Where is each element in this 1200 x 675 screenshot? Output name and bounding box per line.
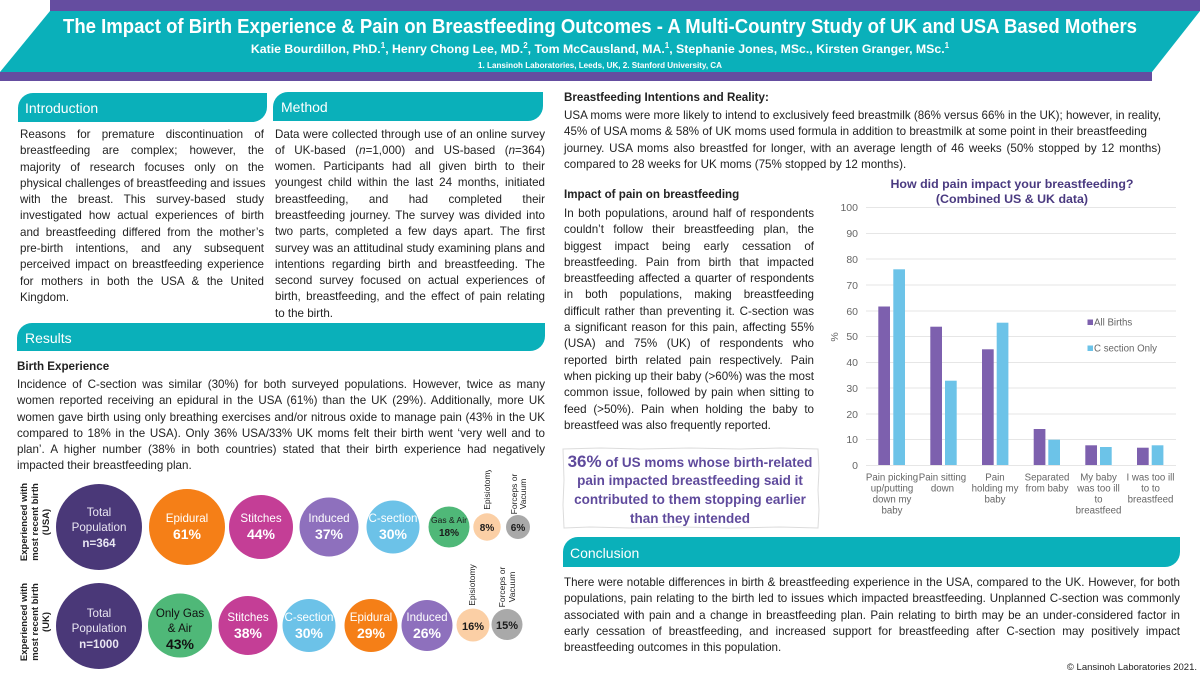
- text: birth experience: women reported receiving an epidural in the USA (61%) than the UK (29%). Additionally, more UK: [17, 394, 545, 407]
- callout: 36% statistic: [562, 448, 820, 528]
- y axis title: %: [829, 332, 841, 342]
- bubble: stitches USA: Stitches: [240, 512, 282, 525]
- text: birth experience: impacted their breastfeeding plan.: [17, 459, 192, 472]
- bubble chart: birth experiences: [19, 470, 530, 669]
- text: impact of pain: In both populations, around half of respondents: [564, 207, 814, 220]
- subheading: impact of pain: Impact of pain on breastfeeding: [564, 188, 739, 201]
- text: birth experience: plan’. A higher number (38% in both countries) stated that their birth experience had negatively: [17, 443, 545, 456]
- y axis labels: 60: [846, 306, 858, 318]
- text: method: women. Participants had all given birth to their: [275, 160, 545, 173]
- text: introduction: Reasons for premature discontinuation of: [20, 128, 264, 141]
- bubble: c-section UK: [282, 599, 336, 652]
- callout text: 36% of US moms whose birth-related: [568, 452, 812, 471]
- text: birth experience: Incidence of C-section was similar (30%) for both surveyed populations. However, twice as many: [17, 378, 545, 391]
- row label: USA: [19, 483, 52, 561]
- label: forceps or vacuum USA: [509, 474, 528, 514]
- text: method: breastfeeding, and had completed their: [275, 193, 545, 206]
- bubble: only gas and air UK: 43%: [166, 636, 195, 652]
- bubble: epidural USA: 61%: [173, 526, 202, 542]
- y axis labels: 50: [846, 331, 858, 343]
- text: intentions and reality: [564, 109, 1161, 171]
- callout text: than they intended: [630, 511, 750, 526]
- bubble: epidural UK: Epidural: [350, 611, 392, 624]
- text: conclusion: There were notable differences in birth & breastfeeding experience in the USA, compared to the UK. However, for both: [564, 576, 1180, 589]
- chart title: (Combined US & UK data): [936, 192, 1088, 206]
- subheading: intentions and reality: Breastfeeding Intentions and Reality:: [564, 91, 769, 104]
- callout text: [568, 452, 812, 526]
- text: impact of pain: breastfeed was also frequently reported.: [564, 419, 771, 432]
- bubble: total population UK: Population: [72, 622, 126, 635]
- bubble: c-section UK: 30%: [295, 625, 324, 641]
- bars: all births: [878, 306, 1149, 465]
- row label: USA: (USA): [41, 509, 52, 535]
- category labels: down my: [873, 494, 912, 506]
- authors: Katie Bourdillon, PhD.1, Henry Chong Lee, MD.2, Tom McCausland, MA.1, Stephanie Jones, MSc., Kirsten Granger, MSc.1: [251, 41, 949, 56]
- row label: UK: (UK): [41, 612, 52, 632]
- bubble: gas and air USA: [428, 506, 470, 548]
- text: introduction: majority of research focuses only on the: [20, 161, 264, 174]
- category labels: baby: [984, 494, 1006, 506]
- category labels: breastfeed: [1076, 506, 1121, 516]
- bubble: c-section USA: [366, 500, 420, 554]
- teal title band: [0, 11, 1200, 72]
- category labels: baby: [881, 506, 903, 516]
- category labels: Pain sitting: [919, 472, 966, 484]
- bubble: stitches UK: [218, 596, 278, 655]
- heading: method: Method: [281, 99, 328, 115]
- bubble: epidural USA: Epidural: [166, 512, 208, 525]
- bubble: induced USA: 37%: [315, 526, 344, 542]
- category labels: breastfeed: [1128, 494, 1173, 506]
- bubble: induced USA: [300, 498, 358, 556]
- header banner: [0, 0, 1200, 81]
- lower purple bar: [0, 72, 1152, 81]
- label: forceps or vacuum USA: Forceps or: [509, 474, 519, 514]
- bubble: total population USA: Total: [87, 506, 111, 519]
- y axis labels: 90: [846, 228, 858, 240]
- text: introduction: [20, 128, 266, 304]
- bubble: induced UK: [402, 600, 452, 651]
- bar chart: how did pain impact breastfeeding: [829, 177, 1176, 516]
- heading: conclusion: Conclusion: [570, 545, 639, 561]
- text: method: [275, 128, 545, 320]
- bubble: total population UK: [56, 583, 142, 669]
- row label: USA: most recent birth: [30, 483, 41, 561]
- heading: introduction: [18, 92, 267, 122]
- text: impact of pain: feed (>50%). Pain when holding the baby to: [564, 403, 814, 416]
- row label: UK: most recent birth: [30, 583, 41, 661]
- text: method: Data were collected through use of an online survey: [275, 128, 545, 140]
- bubble: only gas and air UK: [148, 594, 212, 658]
- bubble: gas and air USA: Gas & Air: [431, 515, 467, 525]
- text: impact of pain: (USA) and 75% (UK) of respondents who: [564, 337, 814, 350]
- y axis labels: 70: [846, 280, 858, 292]
- row label: UK: Experienced with: [19, 583, 30, 661]
- y axis labels: 100: [840, 202, 858, 214]
- category labels: My baby: [1080, 472, 1117, 484]
- text: introduction: and breastfeeding differed from the mother’s: [20, 226, 264, 239]
- text: impact of pain: breastfeeding. Pain from birth that impacted: [564, 256, 814, 269]
- text: introduction: with the breast. This survey-based study: [20, 193, 264, 206]
- text: introduction: for mothers in both the USA & the United: [20, 275, 264, 288]
- bubble: induced UK: Induced: [406, 611, 448, 624]
- bubble: forceps or vacuum USA: 6%: [511, 523, 525, 534]
- text: method: to the birth.: [275, 307, 333, 320]
- y axis labels: 30: [846, 383, 858, 395]
- text: impact of pain: a significant reason for this pain, affecting 55%: [564, 321, 814, 334]
- text: conclusion: associated with pain and a change in breastfeeding plan. Pain relating to birth may be an under-considered factor in: [564, 609, 1180, 622]
- bubble: induced USA: Induced: [308, 512, 350, 525]
- text: impact of pain: when picking up their baby (>60%) was the most: [564, 370, 814, 383]
- callout text: pain impacted breastfeeding said it: [577, 473, 803, 488]
- category labels: was too ill: [1076, 484, 1120, 494]
- bubble: stitches UK: Stitches: [227, 611, 269, 624]
- text: introduction: breastfeeding are complex; however, the: [20, 144, 264, 157]
- text: method: intentions regarding birth and breastfeeding. The: [275, 258, 545, 271]
- text: introduction: physical challenges of breastfeeding and issues: [20, 177, 266, 190]
- text: method: breastfeeding journey. The survey was divided into: [275, 209, 545, 222]
- text: impact of pain: in both populations, making breastfeeding: [564, 288, 814, 301]
- label: forceps or vacuum UK: Vacuum: [507, 572, 517, 602]
- legend: C section Only: [1094, 344, 1157, 354]
- row label: USA: Experienced with: [19, 483, 30, 561]
- text: intentions and reality: compared to 28 weeks for UK moms (75% stopped by 12 months).: [564, 158, 906, 171]
- text: impact of pain: common issue, followed by pain when sitting to: [564, 386, 814, 399]
- heading: introduction: Introduction: [25, 100, 98, 116]
- callout text: contributed to them stopping earlier: [574, 492, 807, 507]
- bubble: episiotomy UK: [456, 608, 490, 642]
- subheading: birth experience: Birth Experience: [17, 360, 109, 373]
- text: intentions and reality: 45% of USA moms & 58% of UK moms used formula in addition to breastmilk at some point in their breastfeeding: [564, 125, 1147, 138]
- bubble: gas and air USA: 18%: [439, 528, 459, 539]
- y axis labels: 10: [846, 434, 858, 446]
- category labels: down: [931, 484, 954, 494]
- affiliations: 1. Lansinoh Laboratories, Leeds, UK, 2. Stanford University, CA: [478, 60, 722, 70]
- bubble: forceps or vacuum UK: 15%: [496, 620, 518, 632]
- chart title: How did pain impact your breastfeeding?: [890, 177, 1134, 191]
- text: impact of pain: biggest impact being early cessation of: [564, 240, 814, 253]
- label: forceps or vacuum UK: [497, 567, 517, 607]
- callout torn-edge box: [563, 448, 819, 528]
- y axis labels: [840, 202, 858, 472]
- bubble: stitches UK: 38%: [234, 625, 263, 641]
- text: impact of pain: reported birth related pain respectively. Pain: [564, 354, 814, 367]
- y axis labels: 0: [852, 460, 858, 472]
- bubble: stitches USA: [229, 495, 293, 559]
- bubble: episiotomy USA: [473, 513, 501, 541]
- y axis labels: 80: [846, 254, 858, 266]
- text: conclusion: [564, 576, 1180, 654]
- row label: UK: [19, 583, 52, 661]
- text: method: two parts, completed a few days apart. The first: [275, 225, 545, 238]
- label: episiotomy UK: Episiotomy: [467, 563, 477, 606]
- heading: results: [17, 323, 545, 351]
- chart title: [890, 177, 1134, 206]
- legend: [1088, 318, 1157, 354]
- legend: All Births: [1094, 318, 1132, 328]
- bubble: forceps or vacuum USA: [506, 515, 530, 539]
- text: method: birth, breastfeeding, and the effect of pain relating: [275, 290, 545, 303]
- text: method: second survey focused on actual experiences of: [275, 274, 545, 287]
- bubble: episiotomy USA: 8%: [480, 523, 494, 534]
- text: conclusion: early cessation of breastfeeding, and increased support for breastfeeding after C-section may positively impact: [564, 625, 1180, 638]
- bubble: stitches USA: 44%: [247, 526, 276, 542]
- copyright: © Lansinoh Laboratories 2021.: [1067, 662, 1197, 673]
- text: introduction: pre-birth intentions, and any subsequent: [20, 242, 264, 255]
- bubble: only gas and air UK: Only Gas: [156, 607, 204, 620]
- text: birth experience: [17, 378, 545, 472]
- text: method: survey was an attitudinal study examining plans and: [275, 242, 545, 255]
- text: impact of pain: [564, 207, 814, 432]
- y axis labels: 20: [846, 409, 858, 421]
- category labels: from baby: [1025, 484, 1069, 494]
- bubble: induced UK: 26%: [413, 625, 442, 641]
- category labels: Pain: [985, 472, 1005, 484]
- text: intentions and reality: journey. USA moms also breastfed for longer, with an average length of 46 weeks (50% stopped by 12 months): [564, 142, 1161, 155]
- bubble: total population USA: [56, 484, 142, 570]
- text: birth experience: compared to 18% in the USA). Only 36% USA/33% UK moms felt their birth went ‘very well and to: [17, 427, 545, 440]
- top purple bar: [50, 0, 1200, 11]
- category labels: Pain picking: [866, 472, 918, 484]
- bubble: epidural UK: [344, 599, 398, 652]
- text: impact of pain: difficult rather than preventing it. C-section was: [564, 305, 814, 318]
- heading: results: Results: [25, 330, 72, 346]
- bubble: total population UK: n=1000: [79, 638, 119, 651]
- category labels: to to: [1141, 484, 1160, 494]
- bubble: c-section USA: 30%: [379, 526, 408, 542]
- text: introduction: investigated how actual experiences of birth: [20, 209, 264, 222]
- text: intentions and reality: USA moms were more likely to intend to exclusively feed breastmilk (86% versus 66% in the UK); however, in reality,: [564, 109, 1161, 122]
- bubble: epidural USA: [149, 489, 225, 565]
- bubble: total population USA: Population: [72, 521, 126, 534]
- bubble: epidural UK: 29%: [357, 625, 386, 641]
- text: conclusion: breastfeeding outcomes in this population.: [564, 641, 781, 654]
- text: method: of UK-based (n=1,000) and US-based (n=364): [275, 144, 545, 157]
- text: birth experience: women gave birth using only breathing exercises and/or nitrous oxide to manage pain (43% in the UK: [17, 411, 545, 424]
- bubble: c-section UK: C-section: [285, 611, 333, 624]
- bubble: c-section USA: C-section: [369, 512, 417, 525]
- category labels: Separated: [1025, 472, 1069, 484]
- bubble: total population USA: n=364: [82, 537, 116, 550]
- bubble: episiotomy UK: 16%: [462, 621, 484, 633]
- bubble: forceps or vacuum UK: [492, 609, 522, 640]
- category labels: to: [1094, 494, 1103, 506]
- category labels: [866, 472, 1174, 516]
- text: method: youngest child within the last 24 months, initiated: [275, 176, 545, 189]
- bars: c section only: [893, 269, 1163, 465]
- category labels: up/putting: [871, 484, 913, 494]
- heading: method: [273, 92, 543, 121]
- category labels: I was too ill: [1127, 472, 1174, 484]
- label: forceps or vacuum USA: Vacuum: [518, 479, 528, 509]
- text: impact of pain: breastfeeding affected a quarter of respondents: [564, 272, 814, 285]
- heading: conclusion: [563, 537, 1180, 567]
- label: forceps or vacuum UK: Forceps or: [497, 567, 507, 607]
- text: introduction: Kingdom.: [20, 291, 69, 304]
- y axis labels: 40: [846, 357, 858, 369]
- text: introduction: perceived impact on breastfeeding experience: [20, 258, 264, 271]
- bubble: only gas and air UK: & Air: [168, 622, 192, 635]
- text: conclusion: populations, pain relating to the birth led to issues which impacted breastfeeding. Unplanned C-section was commonly: [564, 592, 1180, 605]
- text: impact of pain: couldn’t follow their breastfeeding plan, the: [564, 223, 814, 236]
- category labels: holding my: [972, 484, 1019, 494]
- bubble: total population UK: Total: [87, 607, 111, 620]
